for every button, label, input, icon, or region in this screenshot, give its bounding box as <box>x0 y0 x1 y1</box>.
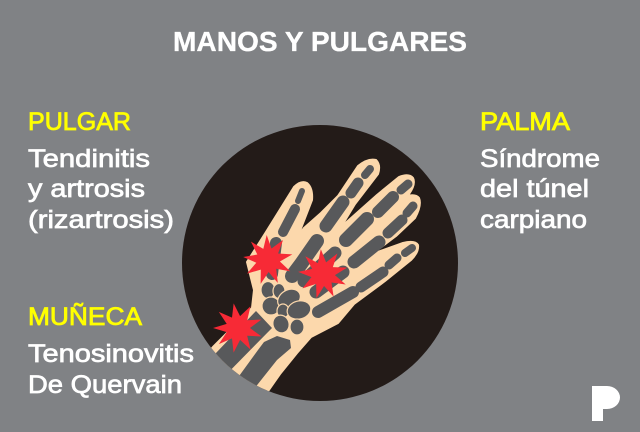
text block: palma: PALMA <box>480 108 570 136</box>
title: MANOS Y PULGARES <box>173 26 467 57</box>
bones: index finger <box>292 169 370 276</box>
bone: ulna <box>240 336 291 386</box>
bones <box>272 169 413 312</box>
bones: middle finger <box>304 184 408 281</box>
text block: palma <box>480 108 600 234</box>
bones: ring finger <box>316 206 413 292</box>
bones: little finger <box>318 248 412 312</box>
text block: pulgar: PULGAR <box>28 108 131 136</box>
text block: palma: Síndrome <box>480 145 600 173</box>
text block: pulgar: Tendinitis <box>28 145 150 173</box>
text block: muñeca: Tenosinovitis <box>28 340 194 368</box>
pain star: thumb <box>242 234 294 285</box>
pain star: palm <box>296 247 350 300</box>
text block: palma: del túnel <box>480 175 589 203</box>
circle with hand x-ray illustration <box>182 125 458 401</box>
text block: palma: carpiano <box>480 206 587 234</box>
text block: pulgar: y artrosis <box>28 175 145 203</box>
text block: pulgar <box>28 108 174 234</box>
text block: muñeca <box>28 302 194 399</box>
text block: muñeca: De Quervain <box>28 371 182 399</box>
bones: carpals <box>261 282 313 335</box>
logo: P <box>592 386 620 421</box>
dark circle <box>182 125 458 401</box>
hand silhouette <box>211 158 421 392</box>
text block: pulgar: (rizartrosis) <box>28 206 174 234</box>
pain star: wrist <box>209 299 266 355</box>
bone: radius <box>216 311 272 369</box>
bones: thumb <box>272 191 302 274</box>
text block: muñeca: MUÑECA <box>28 302 142 331</box>
